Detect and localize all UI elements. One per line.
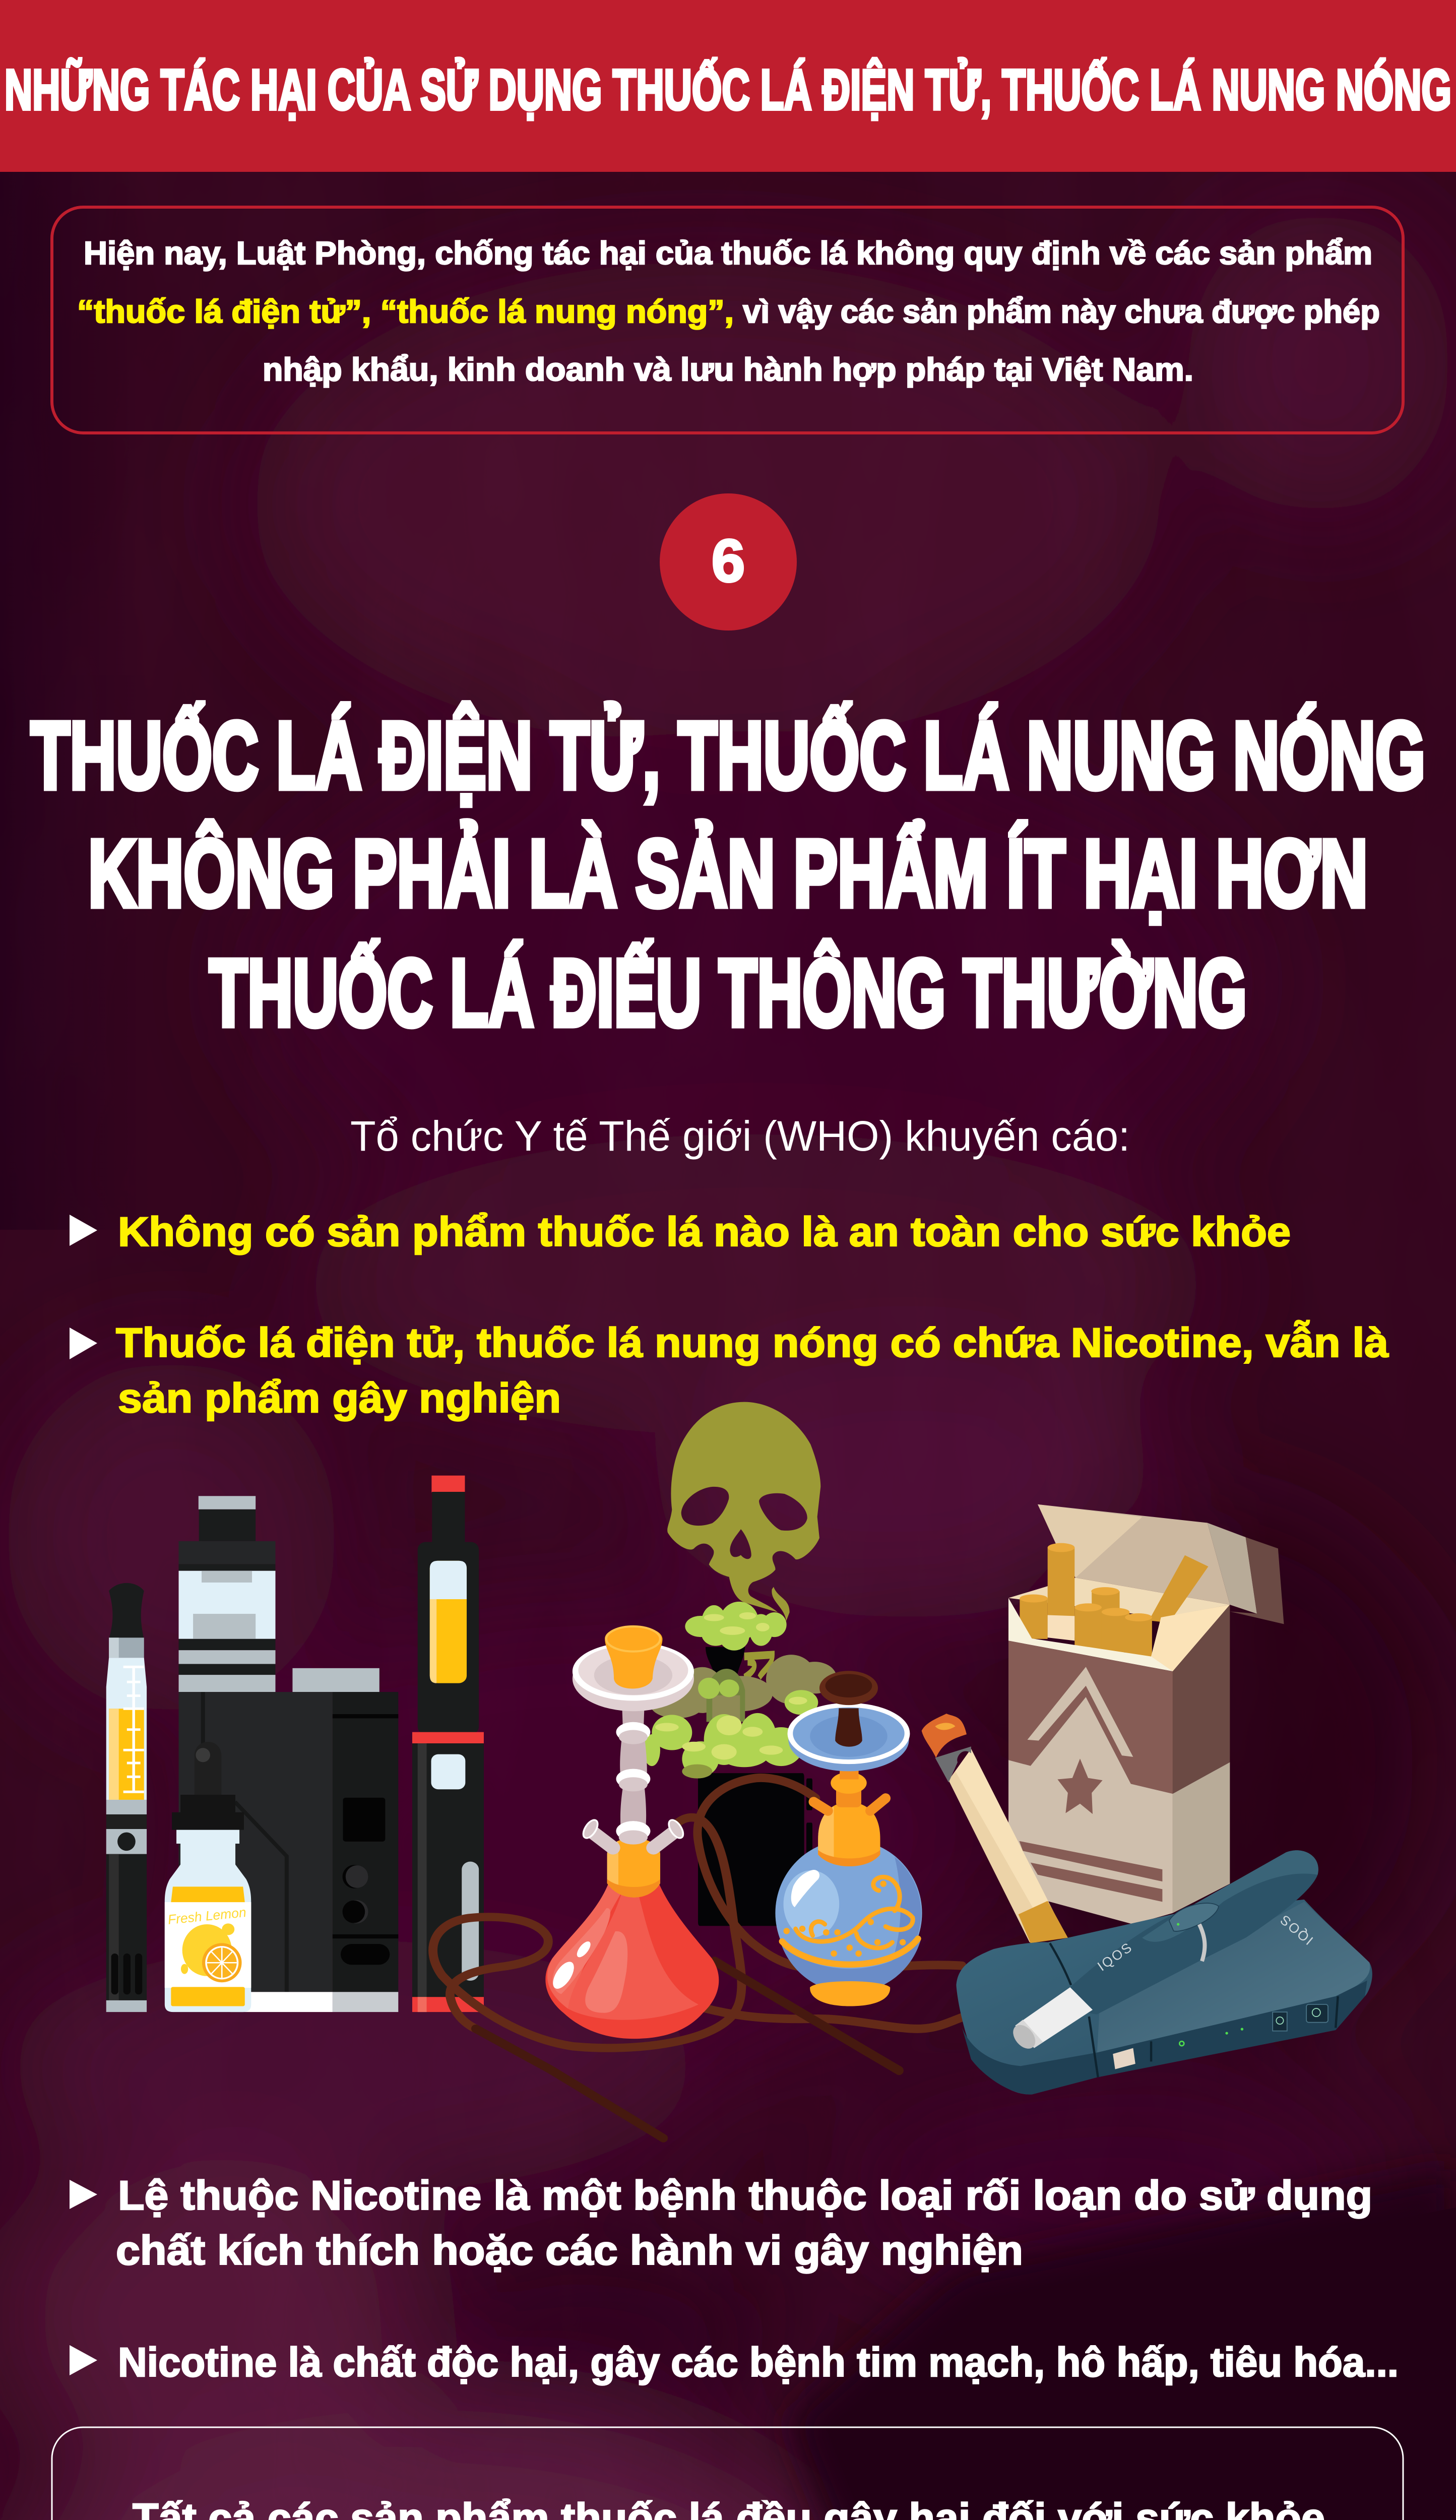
blue hookah [775, 1671, 922, 2006]
red hookah [545, 1626, 719, 2039]
bullet: no safe product: Không có sản phẩm thuốc lá nào là an toàn cho sức khỏe [118, 1209, 1291, 1255]
panel: COP7 recommendation [52, 2427, 1403, 2520]
main heading [31, 703, 1425, 1046]
header band [0, 0, 1456, 172]
bullet: nicotine addictive: sản phẩm gây nghiện [118, 1375, 561, 1421]
panel: legal intro: vì vậy các sản phẩm này chưa được phép [743, 293, 1380, 330]
bullet: nicotine dependence: Lệ thuộc Nicotine là một bệnh thuộc loại rối loạn do sử dụng [118, 2173, 1372, 2219]
IQOS heated tobacco device [956, 1850, 1372, 2095]
bullet: nicotine addictive: Thuốc lá điện tử, thuốc lá nung nóng có chứa Nicotine, vẫn là [116, 1320, 1388, 1366]
bullet: nicotine dependence: chất kích thích hoặc các hành vi gây nghiện [116, 2228, 1023, 2274]
panel: legal intro: Hiện nay, Luật Phòng, chống tác hại của thuốc lá không quy định về các sản phẩm [84, 235, 1372, 271]
box mod vape [179, 1496, 398, 2012]
panel: legal intro: “thuốc lá điện tử”, “thuốc lá nung nóng”, [77, 293, 734, 330]
WHO subheading: Tổ chức Y tế Thế giới (WHO) khuyến cáo: [350, 1112, 1130, 1160]
bullet: nicotine dependence [70, 2173, 1372, 2274]
panel: legal intro [52, 207, 1403, 433]
hookah hoses [433, 1778, 964, 2138]
tall vape mod [412, 1476, 484, 2012]
e-liquid bottle: Fresh Lemon: Fresh Lemon [167, 1905, 247, 1927]
bullet: nicotine toxic: Nicotine là chất độc hại, gây các bệnh tim mạch, hô hấp, tiêu hóa... [118, 2340, 1399, 2385]
illustration: tobacco products [106, 1402, 1372, 2138]
vape pen [106, 1583, 147, 2012]
bullet: nicotine addictive [70, 1320, 1388, 1421]
panel: legal intro: nhập khẩu, kinh doanh và lưu hành hợp pháp tại Việt Nam. [263, 351, 1193, 388]
IQOS heated tobacco device: IQOS [1095, 1939, 1135, 1974]
number badge 6 [660, 493, 797, 631]
skull and smoke [644, 1402, 837, 1926]
e-liquid bottle: Fresh Lemon [165, 1742, 251, 2012]
burning cigarette [922, 1714, 1068, 1943]
cigarette pack [1008, 1504, 1284, 1924]
IQOS heated tobacco device: IQOS [1276, 1911, 1316, 1948]
number badge 6: 6 [712, 527, 745, 595]
